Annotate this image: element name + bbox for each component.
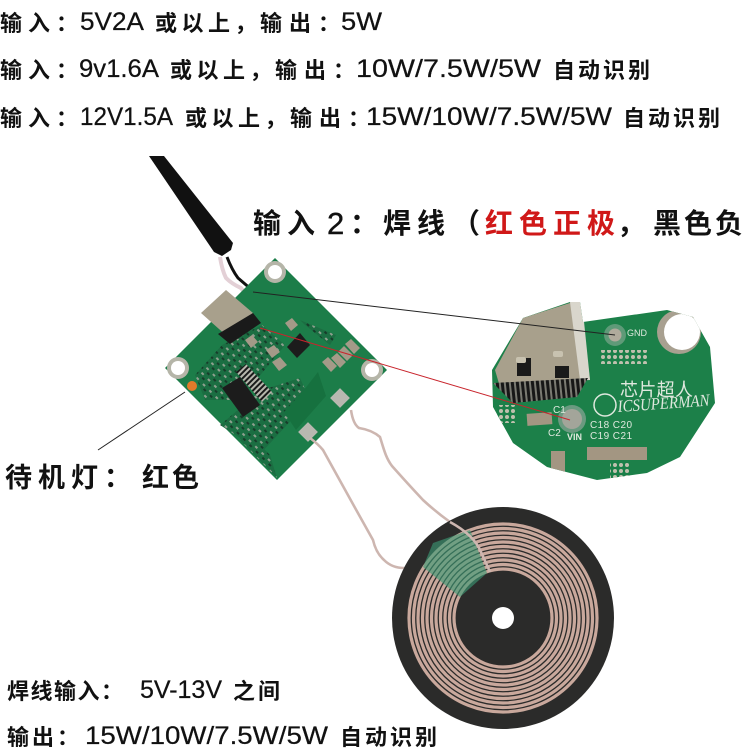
inset: magnified board (492, 302, 715, 480)
input spec line 1: 5V2A (80, 8, 144, 36)
solder input range: 焊线输入： (7, 679, 125, 704)
wireless charging coil (392, 507, 614, 729)
pin rows (236, 364, 272, 402)
standby led (187, 381, 197, 391)
green tape (423, 530, 487, 597)
heading: solder input: 输入 (253, 208, 321, 239)
gnd pad (604, 324, 626, 346)
capacitors close-up (527, 412, 647, 473)
input spec line 3: 12V1.5A (80, 103, 173, 131)
input spec line 2: 输出： (275, 58, 362, 83)
small chip (287, 333, 310, 358)
usb-c connector (201, 290, 261, 344)
silkscreen (548, 328, 711, 442)
via cluster (600, 350, 648, 364)
input spec line 1: 输出： (260, 11, 347, 36)
input spec line 2: 输入： (0, 58, 84, 83)
silkscreen: C18 C20 (590, 420, 632, 431)
heading: solder input: 焊线 (383, 208, 451, 239)
heading: solder input: 红色正极 (485, 208, 621, 239)
input spec line 1: 输入： (0, 11, 84, 36)
input spec line 3: 输出： (290, 106, 377, 131)
input spec line 2: 自动识别 (553, 58, 653, 83)
silkscreen: VIN (567, 432, 582, 442)
input spec line 2: 9v1.6A (79, 55, 159, 83)
heading: solder input: 黑色负 (653, 208, 746, 239)
standby light label: 待机灯： (5, 463, 137, 493)
vin pad (558, 405, 586, 433)
silkscreen: C1 (553, 405, 566, 416)
component clusters (195, 325, 285, 400)
input spec line 3 (0, 103, 723, 131)
output power: 输出： (7, 725, 82, 750)
pcb board (165, 258, 387, 480)
input spec line 3: 15W/10W/7.5W/5W (366, 103, 612, 131)
output power: 15W/10W/7.5W/5W (85, 722, 328, 750)
output pads (298, 388, 350, 442)
output power: 自动识别 (340, 725, 440, 750)
solder input range: 之间 (233, 679, 283, 704)
heading: solder input: （ (452, 208, 480, 239)
wire overlay (450, 522, 490, 572)
input spec line 2: 10W/7.5W/5W (356, 55, 541, 83)
capacitors (245, 318, 360, 372)
silkscreen: ICSUPERMAN (616, 391, 711, 416)
input spec line 3: 自动识别 (623, 106, 723, 131)
standby light label: 红色 (142, 463, 202, 493)
heading: solder input: ， (617, 208, 645, 239)
input spec line 1: 或以上， (155, 11, 261, 36)
silkscreen: GND (627, 328, 648, 338)
input spec line 1: 5W (341, 8, 382, 36)
output power (7, 722, 440, 750)
input spec line 3: 输入： (0, 106, 84, 131)
coil wires (310, 410, 490, 572)
pointer lines (98, 292, 615, 450)
heading: solder input: 2 (327, 206, 344, 241)
pcb traces (284, 372, 326, 430)
input spec line 3: 或以上， (185, 106, 291, 131)
input spec line 1 (0, 8, 382, 36)
heading: solder input (253, 206, 746, 241)
input spec line 2 (0, 55, 653, 83)
input spec line 2: 或以上， (170, 58, 276, 83)
silkscreen: C2 (548, 428, 561, 439)
usb cable (149, 156, 258, 327)
silkscreen: C19 C21 (590, 431, 632, 442)
standby light label (5, 463, 202, 493)
mounting hole (657, 310, 701, 354)
silkscreen: 芯片超人 (620, 380, 693, 400)
main chip (222, 377, 260, 417)
heading: solder input: ： (350, 208, 378, 239)
solder input range (7, 676, 283, 704)
solder input range: 5V-13V (140, 676, 222, 704)
usb connector close-up (495, 302, 590, 387)
